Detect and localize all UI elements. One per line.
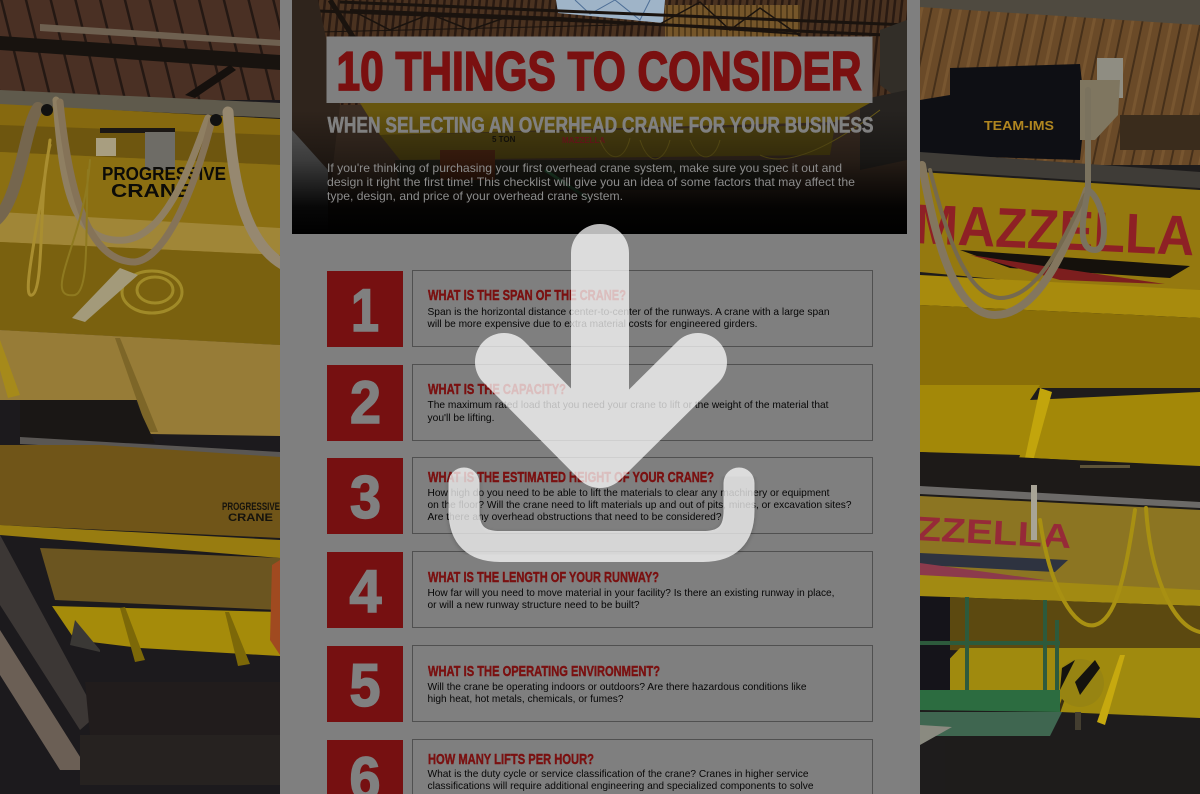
- checklist item 4: 4: [350, 558, 382, 625]
- header photo: crane in facility with dark gradient: 5 TON: [492, 135, 516, 144]
- intro paragraph: If you're thinking of purchasing your first overhead crane system, make sure you spec it out and: [327, 161, 842, 175]
- checklist item 3: WHAT IS THE ESTIMATED HEIGHT OF YOUR CRANE?: [428, 469, 714, 486]
- checklist item 6: [327, 740, 872, 794]
- checklist item 2: The maximum rated load that you need your crane to lift or the weight of the material that: [428, 399, 829, 411]
- left background photo: overhead crane: CRANE: [111, 181, 191, 201]
- intro paragraph: [327, 161, 855, 203]
- left background photo: overhead crane: PROGRESSIVE: [222, 501, 280, 513]
- checklist item 1: WHAT IS THE SPAN OF THE CRANE?: [428, 287, 626, 304]
- checklist item 3: Are there any overhead obstructions that need to be considered?: [428, 511, 722, 523]
- checklist item 1: [327, 270, 872, 347]
- checklist item 4: How far will you need to move material in your facility? Is there an existing runway in place,: [428, 587, 834, 599]
- checklist item 6: HOW MANY LIFTS PER HOUR?: [428, 751, 594, 768]
- right background photo: overhead crane with hoist: ZZELLA: [916, 510, 1072, 556]
- checklist item 6: classifications will require additional engineering and specialized components to solve: [428, 780, 814, 792]
- header photo: crane in facility with dark gradient: [292, 0, 907, 234]
- checklist item 1: will be more expensive due to extra material costs for engineered girders.: [427, 318, 758, 330]
- checklist item 3: [327, 458, 872, 534]
- checklist item 2: [327, 364, 872, 441]
- center white panel dimmed: [280, 0, 920, 794]
- icon: download arrow overlay: [464, 253, 739, 548]
- checklist item 5: Will the crane be operating indoors or outdoors? Are there hazardous conditions like: [428, 681, 807, 693]
- checklist item 5: [327, 646, 872, 722]
- left background photo: overhead crane: PROGRESSIVE: [102, 164, 226, 184]
- checklist item 5: 5: [350, 652, 380, 719]
- checklist item 3: on the floor? Will the crane need to lift materials up and out of pits, mines, or excavation sites?: [428, 499, 852, 511]
- checklist item 4: WHAT IS THE LENGTH OF YOUR RUNWAY?: [428, 569, 659, 586]
- checklist item 2: you'll be lifting.: [428, 412, 494, 424]
- right background photo: overhead crane with hoist: TEAM-IMS: [984, 118, 1054, 133]
- checklist item 2: 2: [350, 369, 381, 436]
- checklist item 2: WHAT IS THE CAPACITY?: [428, 381, 566, 398]
- left background photo: overhead crane: CRANE: [228, 512, 273, 524]
- right background photo: overhead crane with hoist: [913, 0, 1200, 794]
- title banner: 10 Things to Consider: 10 THINGS TO CONSIDER: [336, 40, 862, 102]
- checklist item 4: [327, 552, 872, 628]
- intro paragraph: type, design, and price of your overhead crane system.: [327, 189, 623, 203]
- checklist item 3: How high do you need to be able to lift the materials to clear any machinery or equipment: [428, 487, 830, 499]
- checklist item 6: What is the duty cycle or service classification of the crane? Cranes in higher service: [428, 768, 809, 780]
- checklist item 1: Span is the horizontal distance center-to-center of the runways. A crane with a large span: [428, 306, 830, 318]
- checklist item 5: WHAT IS THE OPERATING ENVIRONMENT?: [428, 663, 660, 680]
- checklist item 4: or will a new runway structure need to be built?: [428, 599, 640, 611]
- header photo: crane in facility with dark gradient: MAZZELLA: [562, 136, 605, 145]
- checklist item 3: 3: [350, 464, 381, 531]
- checklist item 5: high heat, hot metals, chemicals, or fumes?: [428, 693, 624, 705]
- intro paragraph: design it right the first time! This checklist will give you an idea of some factors that may affect the: [327, 175, 855, 189]
- left background photo: overhead crane: [0, 0, 284, 794]
- checklist item 1: 1: [351, 277, 379, 344]
- subtitle: WHEN SELECTING AN OVERHEAD CRANE FOR YOUR BUSINESS: [328, 112, 874, 138]
